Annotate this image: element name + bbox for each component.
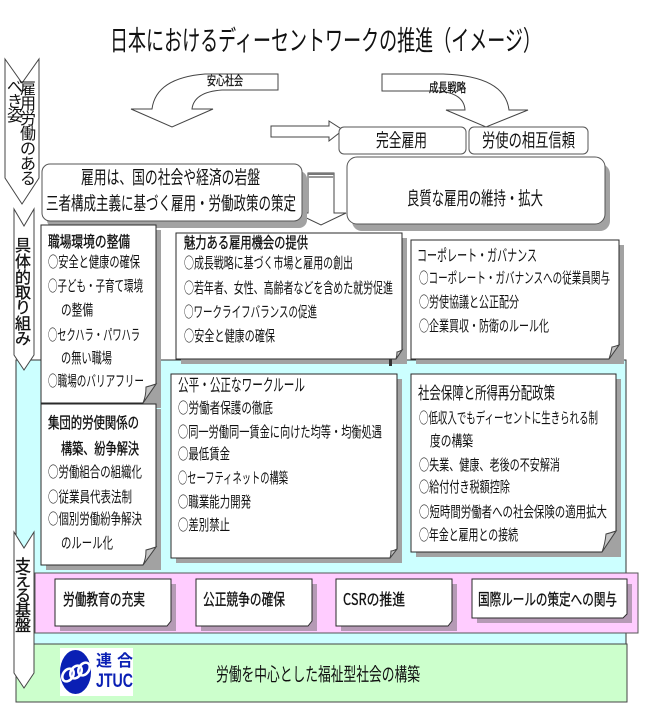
arrow: 具体的取り組み chevron [14,209,34,370]
logo: 連合 JTUC: JTUC [96,671,133,692]
arrow: 雇用労働のあるべき姿 chevron [5,59,39,204]
panel: 公平・公正なワークルール: ○同一労働同一賃金に向けた均等・均衡処遇 [178,421,382,442]
panel: cyan background band [16,360,626,645]
text: 労働を中心とした福祉型社会の構築: 労働を中心とした福祉型社会の構築 [216,661,420,687]
arrow: 支える基盤 chevron: 支える基盤 [15,552,31,636]
panel: 職場環境の整備: ○セクハラ・パワハラ [48,324,140,345]
panel: 職場環境の整備: の無い職場 [61,347,112,368]
panel: 魅力ある雇用機会の提供: ○成長戦略に基づく市場と雇用の創出 [184,252,353,273]
panel: 社会保障と所得再分配政策: 度の構築 [430,430,473,451]
panel: 職場環境の整備: の整備 [61,299,93,320]
arrow: 安心社会 curved [131,70,278,127]
panel: コーポレート・ガバナンス: ○企業買収・防衛のルール化 [419,315,549,336]
panel: 公平・公正なワークルール: ○労働者保護の徹底 [178,397,273,418]
box: 公正競争の確保: 公正競争の確保 [203,586,285,610]
panel: 社会保障と所得再分配政策: ○失業、健康、老後の不安解消 [419,454,560,475]
panel: 魅力ある雇用機会の提供: ○ワークライフバランスの促進 [184,301,317,322]
box: 良質な雇用の維持・拡大: 良質な雇用の維持・拡大 [407,185,543,211]
heading: 職場環境の整備 [48,230,130,252]
panel: 公平・公正なワークルール: ○職業能力開発 [178,491,251,512]
label: 安心社会: 安心社会 [207,70,243,89]
panel: 魅力ある雇用機会の提供: ○若年者、女性、高齢者などを含めた就労促進 [184,277,393,298]
box: 雇用は国の社会や経済の岩盤: 三者構成主義に基づく雇用・労働政策の策定 [46,190,296,216]
box: 雇用は国の社会や経済の岩盤 [42,164,307,228]
panel: green base band [16,644,627,702]
panel: 職場環境の整備: ○職場のバリアフリー [48,370,144,391]
logo: 連合 JTUC [60,647,133,696]
heading: 集団的労使関係の [48,411,139,433]
box: 公正競争の確保 [196,579,317,631]
arrow: 雇用労働のあるべき姿 chevron: 雇用労働のある [20,75,36,189]
box: 良質な雇用の維持・拡大 [347,157,610,231]
heading: コーポレート・ガバナンス [417,242,537,266]
panel: 集団的労使関係の構築、紛争解決: 構築、紛争解決 [61,437,139,459]
panel: 職場環境の整備: ○安全と健康の確保 [48,251,140,272]
panel: 社会保障と所得再分配政策: ○年金と雇用との接続 [419,524,518,545]
box: 労働教育の充実 [55,579,176,631]
panel: コーポレート・ガバナンス: ○労使協議と公正配分 [419,291,519,312]
arrow: 具体的取り組み chevron: 具体的取り組み [15,232,31,349]
box: 完全雇用: 完全雇用 [376,127,427,153]
box: 国際ルールの策定への関与 [472,579,632,623]
panel: 集団的労使関係の構築、紛争解決 [41,404,161,570]
box: CSRの推進 [336,579,457,631]
arrow: 成長戦略 curved [382,74,528,127]
box: 労使の相互信頼: 労使の相互信頼 [482,127,575,153]
panel: 魅力ある雇用機会の提供 [176,231,407,364]
panel: 集団的労使関係の構築、紛争解決: ○労働組合の組織化 [48,461,142,482]
panel: 集団的労使関係の構築、紛争解決: のルール化 [61,532,113,553]
panel: 集団的労使関係の構築、紛争解決: ○個別労働紛争解決 [48,508,142,529]
panel: 社会保障と所得再分配政策 [411,374,621,557]
arrow: 雇用労働のあるべき姿 chevron: べき姿 [7,73,23,126]
panel: 公平・公正なワークルール [171,371,402,563]
box: 労働教育の充実: 労働教育の充実 [63,586,145,610]
panel: 社会保障と所得再分配政策: ○給付付き税額控除 [419,476,510,497]
box: 完全雇用 [339,127,466,154]
panel: 公平・公正なワークルール: ○差別禁止 [178,514,230,535]
panel: pink foundation band [35,573,638,633]
label: 成長戦略: 成長戦略 [429,77,466,96]
heading: 公平・公正なワークルール [178,371,305,396]
divider mark [389,359,392,366]
panel: 魅力ある雇用機会の提供: ○安全と健康の確保 [184,325,275,346]
heading: 社会保障と所得再分配政策 [418,379,555,404]
heading: 魅力ある雇用機会の提供 [184,231,308,253]
arrow: 支える基盤 chevron [14,532,34,688]
panel: コーポレート・ガバナンス [411,240,624,364]
box: 雇用は国の社会や経済の岩盤: 雇用は、国の社会や経済の岩盤 [81,164,260,190]
panel: 公平・公正なワークルール: ○最低賃金 [178,443,230,464]
panel: 職場環境の整備: ○子ども・子育て環境 [48,275,143,296]
panel: 公平・公正なワークルール: ○セーフティネットの構築 [178,467,288,488]
panel: 職場環境の整備 [41,225,161,408]
arrow: right block arrow [271,121,343,141]
logo: 連合 JTUC: 連 [96,647,112,671]
box: CSRの推進: CSRの推進 [343,586,405,610]
panel: 集団的労使関係の構築、紛争解決: ○従業員代表法制 [48,486,132,507]
arrow: central down arrow [296,173,346,225]
logo: 連合 JTUC: 合 [117,647,133,671]
